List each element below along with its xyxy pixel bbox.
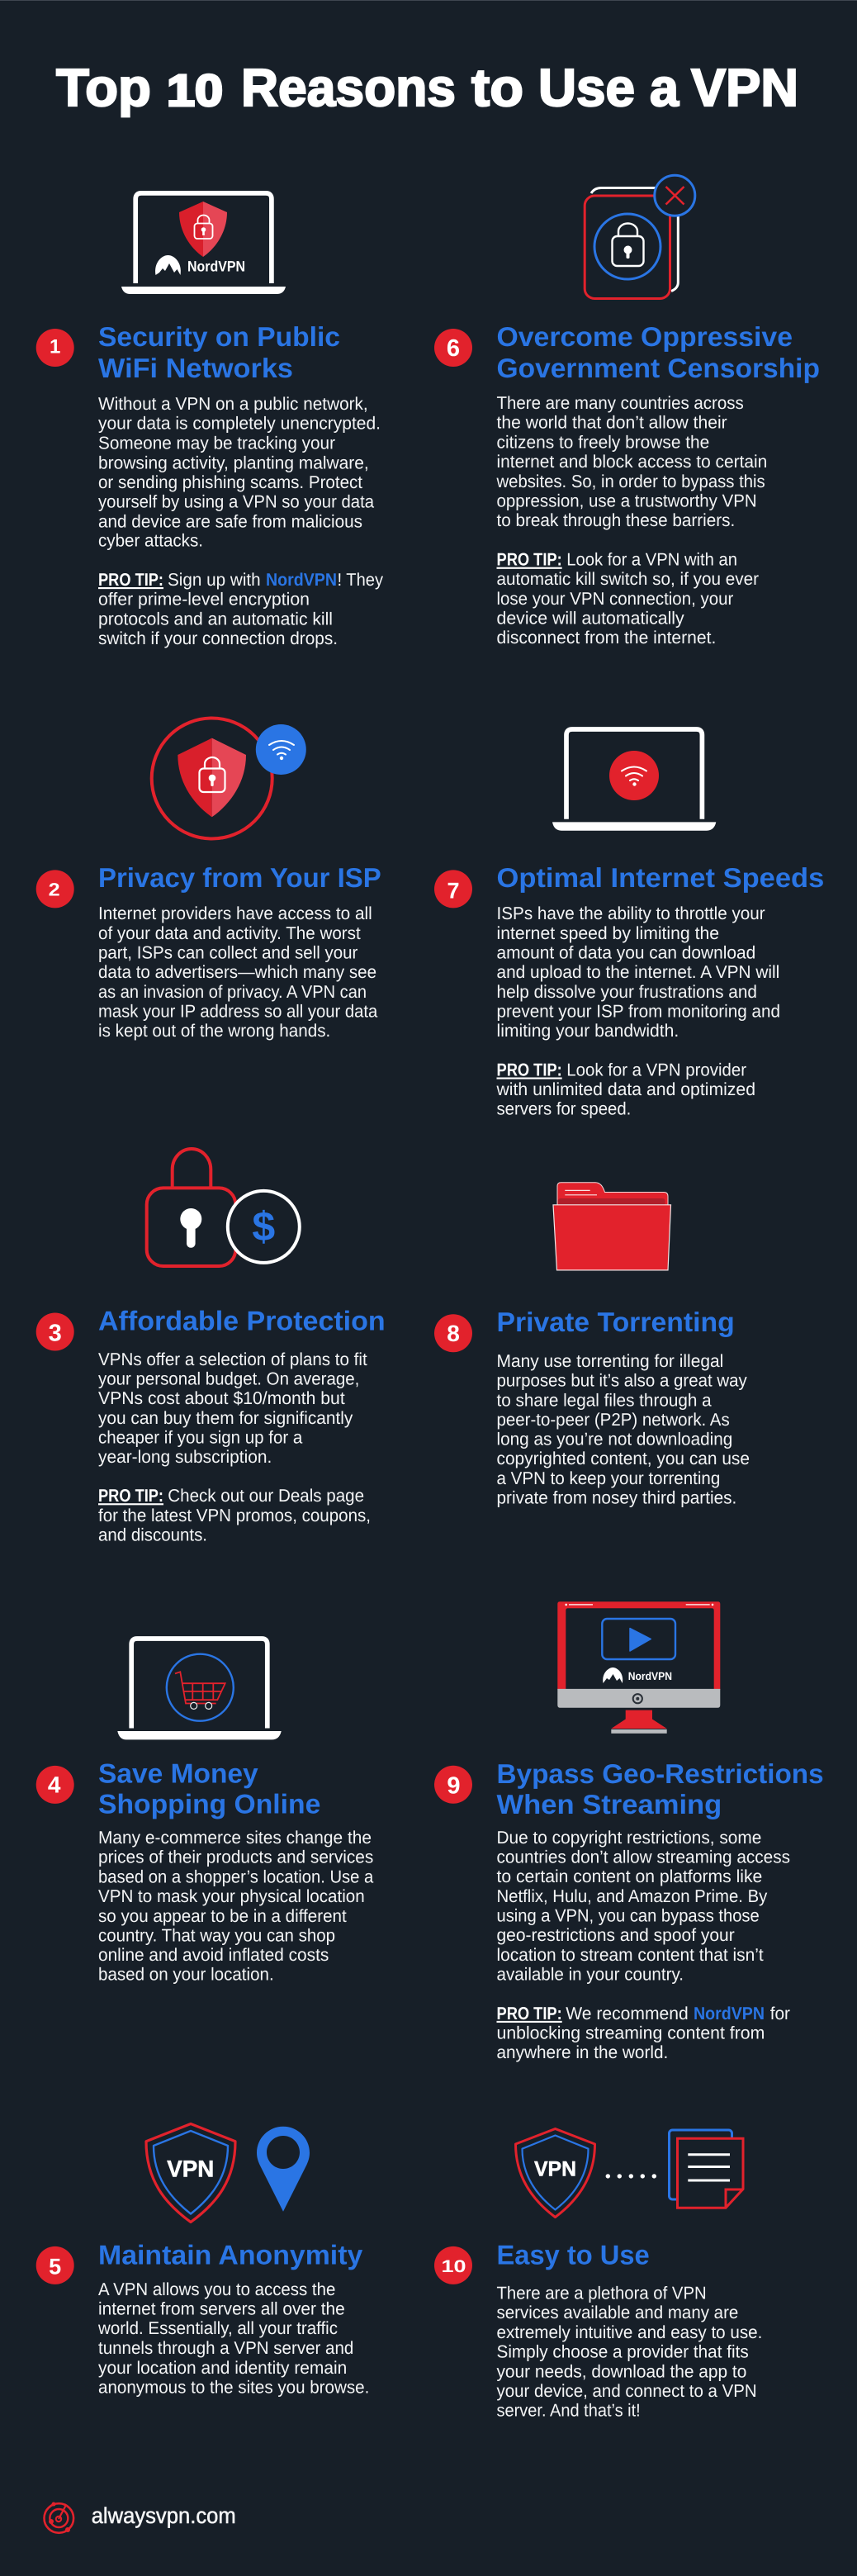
text block: reason 5 body: anonymous to the sites you browse. xyxy=(98,2377,369,2397)
text block: reason 6 body: to break through these barriers. xyxy=(497,510,735,530)
badge: number 3 xyxy=(36,1313,74,1351)
text block: reason 10 body: Simply choose a provider that fits xyxy=(497,2342,749,2362)
badge: number 7 xyxy=(434,870,472,908)
text block: reason 4 body: country. That way you can shop xyxy=(98,1925,335,1945)
badge: number 7: 7 xyxy=(447,879,460,904)
text block: reason 9 body: countries don’t allow streaming access xyxy=(497,1847,790,1867)
text block: reason 4 body: so you appear to be in a different xyxy=(98,1906,347,1926)
text block: reason 6 pro tip: PRO TIP: xyxy=(497,550,562,570)
badge: number 5 xyxy=(36,2246,74,2284)
text block: reason 9 pro tip: unblocking streaming content from xyxy=(497,2023,765,2043)
text block: reason 1 body: Someone may be tracking your xyxy=(98,433,335,453)
title: Top xyxy=(56,58,151,117)
text block: reason 8 body: long as you’re not downloading xyxy=(497,1430,732,1449)
text block: reason 1 pro tip: switch if your connection drops. xyxy=(98,629,338,648)
badge: number 3: 3 xyxy=(49,1321,62,1347)
text block: reason 5 body: tunnels through a VPN server and xyxy=(98,2338,353,2358)
text block: reason 6 pro tip: device will automatically xyxy=(497,609,684,629)
text block: reason 7 body: limiting your bandwidth. xyxy=(497,1021,679,1041)
text block: reason 4 body: based on a shopper’s location. Use a xyxy=(98,1867,373,1886)
panel: reason 1 security on public wifi xyxy=(36,193,383,648)
heading: overcome oppressive government censorship: Government Censorship xyxy=(497,353,820,383)
badge: number 9: 9 xyxy=(447,1772,461,1799)
text block: reason 3 pro tip: PRO TIP: xyxy=(98,1486,163,1506)
badge: number 1: 1 xyxy=(50,336,60,358)
text block: reason 9 body: using a VPN, you can bypass those xyxy=(497,1906,760,1926)
text block: reason 8 body: copyrighted content, you can use xyxy=(497,1449,750,1468)
icon: padlock with dollar coin: $ xyxy=(252,1203,275,1250)
heading: security on public wifi networks: WiFi Networks xyxy=(98,353,293,383)
text block: reason 10 body: your device, and connect to a VPN xyxy=(497,2381,757,2401)
text block: reason 7 body: and upload to the internet. A VPN will xyxy=(497,962,779,982)
text block: reason 10 body: There are a plethora of VPN xyxy=(497,2283,707,2303)
text block: reason 4 body: VPN to mask your physical location xyxy=(98,1886,365,1906)
text block: reason 6 body: internet and block access to certain xyxy=(497,452,767,472)
text block: reason 4 body: online and avoid inflated costs xyxy=(98,1945,329,1965)
text block: reason 9 body: available in your country. xyxy=(497,1965,684,1985)
text block: reason 6 pro tip xyxy=(497,550,759,648)
heading: private torrenting: Private Torrenting xyxy=(497,1307,735,1337)
heading: bypass geo-restrictions when streaming: Bypass Geo-Restrictions xyxy=(497,1758,824,1789)
icon: laptop with red wifi circle xyxy=(552,729,716,831)
heading: bypass geo-restrictions when streaming xyxy=(497,1758,824,1819)
text block: reason 1 pro tip: NordVPN xyxy=(266,570,337,590)
text block: reason 6 pro tip: automatic kill switch so, if you ever xyxy=(497,569,759,589)
icon: laptop with shopping cart xyxy=(117,1639,282,1739)
icon: monitor with play button: NordVPN xyxy=(628,1670,672,1682)
badge: number 10: 10 xyxy=(441,2257,466,2276)
text block: reason 8 body: a VPN to keep your torrenting xyxy=(497,1468,720,1488)
text block: reason 3 pro tip: for the latest VPN promos, coupons, xyxy=(98,1506,371,1525)
text block: reason 3 body: cheaper if you sign up for a xyxy=(98,1427,302,1447)
heading: save money shopping online: Save Money xyxy=(98,1758,258,1789)
text block: reason 7 body: amount of data you can download xyxy=(497,942,755,962)
text block: reason 8 body: peer-to-peer (P2P) network. As xyxy=(497,1410,730,1430)
text block: reason 1 body: your data is completely unencrypted. xyxy=(98,413,381,433)
panel: reason 5 maintain anonymity xyxy=(36,2124,369,2397)
text block: reason 6 body: There are many countries across xyxy=(497,393,744,413)
text block: reason 1 pro tip: protocols and an automatic kill xyxy=(98,610,333,629)
text block: reason 1 pro tip: ! They xyxy=(337,570,383,590)
text block: reason 10 body: your needs, download the app to xyxy=(497,2361,746,2381)
text block: reason 6 pro tip: lose your VPN connection, your xyxy=(497,589,733,609)
title: Reasons xyxy=(241,58,456,117)
badge: number 10 xyxy=(434,2246,472,2284)
text block: reason 6 body xyxy=(496,393,767,530)
icon: VPN shield and location pin: VPN xyxy=(167,2156,214,2181)
text block: reason 1 body: yourself by using a VPN so your data xyxy=(98,491,374,511)
panel: reason 9 bypass geo-restrictions xyxy=(434,1601,824,2062)
heading: optimal internet speeds: Optimal Internet Speeds xyxy=(497,862,824,893)
title: 10 xyxy=(167,66,223,116)
text block: reason 6 pro tip: disconnect from the internet. xyxy=(497,628,716,648)
heading: security on public wifi networks: Security on Public xyxy=(98,321,340,352)
text block: reason 9 pro tip: We recommend xyxy=(566,2004,689,2023)
icon: red folder xyxy=(553,1183,670,1270)
text block: reason 3 body: VPNs cost about $10/month but xyxy=(98,1388,345,1408)
title: VPN xyxy=(691,58,798,117)
text block: reason 7 pro tip: Look for a VPN provider xyxy=(566,1060,746,1080)
badge: number 8 xyxy=(434,1314,472,1352)
panel: reason 3 affordable protection xyxy=(36,1149,386,1544)
text block: reason 8 body: to share legal files through a xyxy=(497,1391,712,1411)
text block: reason 2 body xyxy=(98,904,377,1041)
badge: number 1 xyxy=(36,329,74,367)
icon: monitor with play button xyxy=(557,1601,720,1734)
title: to xyxy=(471,58,523,117)
text block: reason 10 body: server. And that’s it! xyxy=(497,2400,641,2420)
title: a xyxy=(650,58,679,117)
text block: reason 9 pro tip: PRO TIP: xyxy=(497,2004,562,2023)
panel: reason 7 optimal internet speeds xyxy=(434,729,824,1119)
text block: reason 1 body: Without a VPN on a public network, xyxy=(98,394,368,414)
text: alwaysvpn.com: alwaysvpn.com xyxy=(92,2503,236,2528)
heading: privacy from your isp: Privacy from Your ISP xyxy=(98,862,381,893)
text block: reason 2 body: Internet providers have access to all xyxy=(98,904,372,923)
text block: reason 1 body: and device are safe from malicious xyxy=(98,511,362,531)
text block: reason 3 pro tip: and discounts. xyxy=(98,1525,207,1544)
text block: reason 4 body: prices of their products and services xyxy=(98,1848,373,1867)
icon: padlock with dollar coin xyxy=(147,1149,300,1266)
text block: reason 7 pro tip xyxy=(496,1060,755,1119)
text block: reason 2 body: is kept out of the wrong hands. xyxy=(98,1021,330,1041)
text block: reason 2 body: as an invasion of privacy. A VPN can xyxy=(98,982,367,1002)
text block: reason 7 body xyxy=(497,904,780,1041)
heading: save money shopping online: Shopping Online xyxy=(98,1789,320,1819)
icon: VPN shield connected to documents: VPN xyxy=(534,2157,576,2180)
panel: reason 10 easy to use xyxy=(434,2129,762,2420)
text block: reason 9 body: Due to copyright restrictions, some xyxy=(497,1828,761,1848)
heading: security on public wifi networks xyxy=(98,321,340,383)
text block: reason 9 body: to certain content on platforms like xyxy=(497,1867,762,1886)
text block: reason 8 body: private from nosey third parties. xyxy=(497,1488,736,1508)
text block: reason 7 body: ISPs have the ability to throttle your xyxy=(497,904,765,923)
text block: reason 1 body xyxy=(98,394,381,551)
text block: reason 3 body: your personal budget. On average, xyxy=(98,1369,359,1388)
text block: reason 7 pro tip: PRO TIP: xyxy=(497,1060,562,1080)
text block: reason 1 body: or sending phishing scams. Protect xyxy=(98,472,362,492)
text block: reason 3 body xyxy=(98,1350,367,1467)
text block: reason 5 body: your location and identity remain xyxy=(98,2358,347,2378)
heading: affordable protection: Affordable Protection xyxy=(98,1306,386,1336)
text block: reason 7 body: internet speed by limiting the xyxy=(497,923,719,943)
text block: reason 10 body: services available and many are xyxy=(497,2303,738,2322)
text block: reason 8 body: Many use torrenting for illegal xyxy=(497,1351,723,1371)
text block: reason 7 pro tip: with unlimited data and optimized xyxy=(496,1079,755,1099)
heading: save money shopping online xyxy=(98,1758,320,1819)
text block: reason 6 pro tip: Look for a VPN with an xyxy=(566,550,737,570)
text block: reason 1 pro tip: offer prime-level encryption xyxy=(98,590,310,610)
text block: reason 1 body: cyber attacks. xyxy=(98,531,203,551)
icon: red radar logo xyxy=(45,2502,73,2533)
heading: maintain anonymity: Maintain Anonymity xyxy=(98,2239,363,2270)
text block: reason 6 body: citizens to freely browse the xyxy=(497,432,709,452)
icon: VPN shield and location pin xyxy=(146,2124,310,2222)
text block: reason 9 body xyxy=(497,1828,790,1985)
icon: shield in circle with wifi badge xyxy=(152,719,306,839)
text block: reason 7 pro tip: servers for speed. xyxy=(497,1099,631,1119)
text block: reason 4 body: based on your location. xyxy=(98,1964,274,1984)
text block: reason 1 pro tip: Sign up with xyxy=(168,570,261,590)
heading: bypass geo-restrictions when streaming: When Streaming xyxy=(497,1789,722,1819)
heading: overcome oppressive government censorship: Overcome Oppressive xyxy=(497,321,793,352)
text block: reason 8 body xyxy=(497,1351,750,1508)
text block: reason 4 body: Many e-commerce sites change the xyxy=(98,1828,372,1848)
text block: reason 4 body xyxy=(98,1828,373,1984)
icon: laptop with shield and NordVPN logo: NordVPN xyxy=(187,258,245,274)
text block: reason 1 body: browsing activity, planting malware, xyxy=(98,453,369,472)
badge: number 4 xyxy=(36,1766,74,1804)
text block: reason 5 body: A VPN allows you to access the xyxy=(98,2279,335,2299)
text block: reason 10 body xyxy=(497,2283,762,2420)
text block: reason 3 pro tip xyxy=(98,1486,371,1544)
text block: reason 7 body: help dissolve your frustrations and xyxy=(497,982,757,1002)
icon: locked square with blocked badge xyxy=(585,175,695,299)
text block: reason 2 body: part, ISPs can collect and sell your xyxy=(98,942,357,962)
badge: number 4: 4 xyxy=(48,1772,61,1798)
text block: reason 1 pro tip xyxy=(98,570,383,648)
text block: reason 6 body: the world that don’t allow their xyxy=(497,412,727,432)
badge: number 2 xyxy=(36,870,74,908)
text block: reason 5 body: world. Essentially, all your traffic xyxy=(97,2318,338,2338)
icon: laptop with shield and NordVPN logo xyxy=(121,193,286,294)
text block: reason 9 pro tip: for xyxy=(770,2004,790,2023)
text block: reason 9 pro tip: NordVPN xyxy=(694,2004,765,2023)
text block: reason 1 pro tip: PRO TIP: xyxy=(98,570,163,590)
icon: VPN shield connected to documents xyxy=(515,2129,743,2217)
footer: alwaysvpn logo and url xyxy=(45,2502,236,2533)
text block: reason 9 body: geo-restrictions and spoof your xyxy=(497,1925,735,1945)
text block: reason 5 body: internet from servers all over the xyxy=(98,2299,345,2319)
text block: reason 9 pro tip: anywhere in the world. xyxy=(497,2042,668,2062)
text block: reason 7 body: prevent your ISP from monitoring and xyxy=(497,1001,780,1021)
title: Use xyxy=(538,58,635,117)
text block: reason 3 body: you can buy them for significantly xyxy=(98,1408,353,1428)
badge: number 6: 6 xyxy=(447,335,460,362)
title xyxy=(56,58,798,117)
text block: reason 6 body: websites. So, in order to bypass this xyxy=(496,472,765,491)
panel: reason 2 privacy from your isp xyxy=(36,719,381,1041)
panel: reason 6 overcome censorship xyxy=(434,175,820,648)
text block: reason 2 body: mask your IP address so all your data xyxy=(98,1001,377,1021)
text block: reason 3 body: VPNs offer a selection of plans to fit xyxy=(98,1350,367,1369)
text block: reason 3 pro tip: Check out our Deals page xyxy=(168,1486,364,1506)
text block: reason 9 pro tip xyxy=(497,2004,790,2062)
text block: reason 9 body: Netflix, Hulu, and Amazon Prime. By xyxy=(497,1886,768,1906)
text block: reason 9 body: location to stream content that isn’t xyxy=(497,1945,764,1965)
panel: reason 8 private torrenting xyxy=(434,1183,750,1508)
text block: reason 3 body: year-long subscription. xyxy=(98,1447,272,1467)
text block: reason 2 body: data to advertisers—which many see xyxy=(98,962,376,982)
text block: reason 10 body: extremely intuitive and easy to use. xyxy=(497,2322,762,2342)
heading: overcome oppressive government censorship xyxy=(497,321,820,383)
badge: number 5: 5 xyxy=(49,2254,61,2279)
badge: number 2: 2 xyxy=(49,879,60,899)
panel: reason 4 save money shopping online xyxy=(36,1639,373,1984)
text block: reason 6 body: oppression, use a trustworthy VPN xyxy=(497,491,757,510)
heading: easy to use: Easy to Use xyxy=(497,2239,650,2270)
text block: reason 2 body: of your data and activity. The worst xyxy=(98,923,361,943)
text block: reason 5 body xyxy=(97,2279,369,2397)
badge: number 8: 8 xyxy=(447,1321,460,1346)
badge: number 9 xyxy=(434,1766,472,1804)
text block: reason 8 body: purposes but it’s also a great way xyxy=(497,1371,747,1391)
badge: number 6 xyxy=(434,329,472,367)
